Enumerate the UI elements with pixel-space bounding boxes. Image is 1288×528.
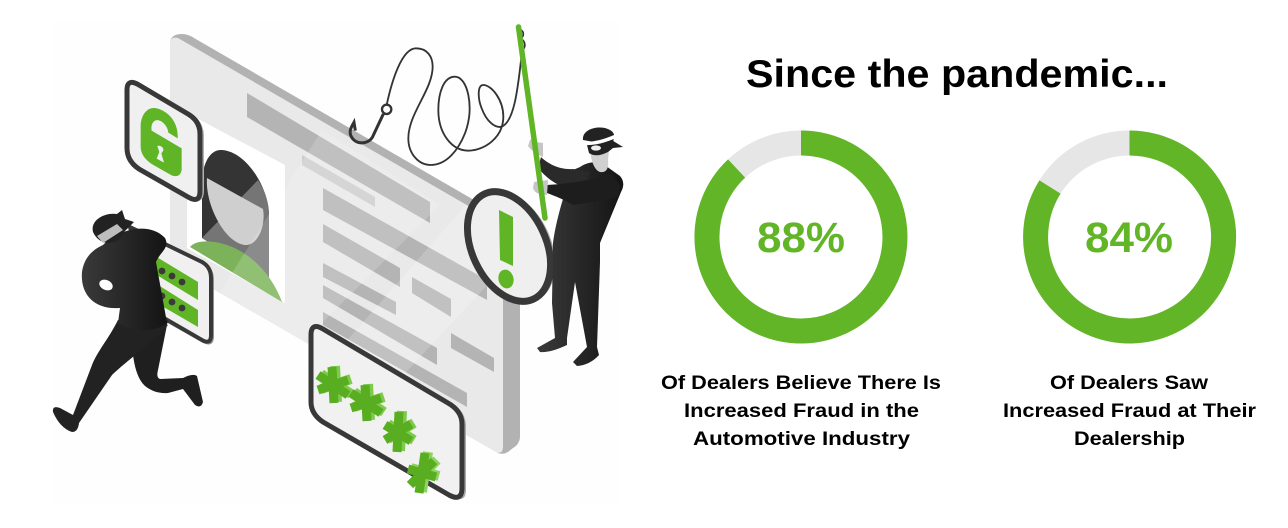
head [93, 210, 134, 243]
hook [350, 105, 391, 143]
asterisks [318, 366, 439, 493]
heading: Since the pandemic... [746, 53, 1168, 96]
caption: 84% statistic: Dealership [1074, 428, 1185, 450]
caption: 88% statistic: Automotive Industry [693, 428, 910, 450]
illustration: phishing and identity theft [52, 22, 623, 504]
card: unlocked padlock [125, 81, 204, 201]
icon: exclamation mark [496, 210, 516, 290]
back leg [133, 320, 203, 406]
front leg [53, 320, 168, 432]
upper arm [538, 157, 590, 189]
torso [82, 229, 167, 330]
identity panel [170, 34, 520, 454]
caption: 88% statistic [661, 372, 941, 450]
password bars [155, 256, 198, 327]
portrait [190, 150, 282, 302]
card: server password dots [130, 227, 214, 344]
lower arm [547, 174, 620, 205]
glass reflections [232, 136, 486, 372]
fishing rod [518, 27, 545, 218]
profile window [187, 113, 285, 303]
thief fishing [518, 27, 623, 366]
caption: 84% statistic: Of Dealers Saw [1050, 372, 1209, 394]
caption: 84% statistic [1003, 372, 1256, 450]
hands [528, 139, 548, 195]
caption: 84% statistic: Increased Fraud at Their [1003, 400, 1256, 422]
icon: open padlock [141, 108, 182, 176]
donut chart: 84% [1036, 143, 1224, 331]
thief running with card [53, 210, 203, 432]
caption: 88% statistic: Of Dealers Believe There Is [661, 372, 941, 394]
head [583, 128, 623, 172]
donut chart: 88% [707, 143, 895, 331]
caption: 88% statistic: Increased Fraud in the [684, 400, 919, 422]
body and legs [537, 162, 623, 366]
text bars [247, 93, 494, 407]
value: 84%: 84% [1085, 214, 1173, 262]
password dots [159, 268, 185, 311]
fishing line and hook [350, 29, 525, 165]
card: masked password [309, 325, 466, 499]
alert badge [451, 177, 572, 317]
value: 88%: 88% [757, 214, 845, 262]
